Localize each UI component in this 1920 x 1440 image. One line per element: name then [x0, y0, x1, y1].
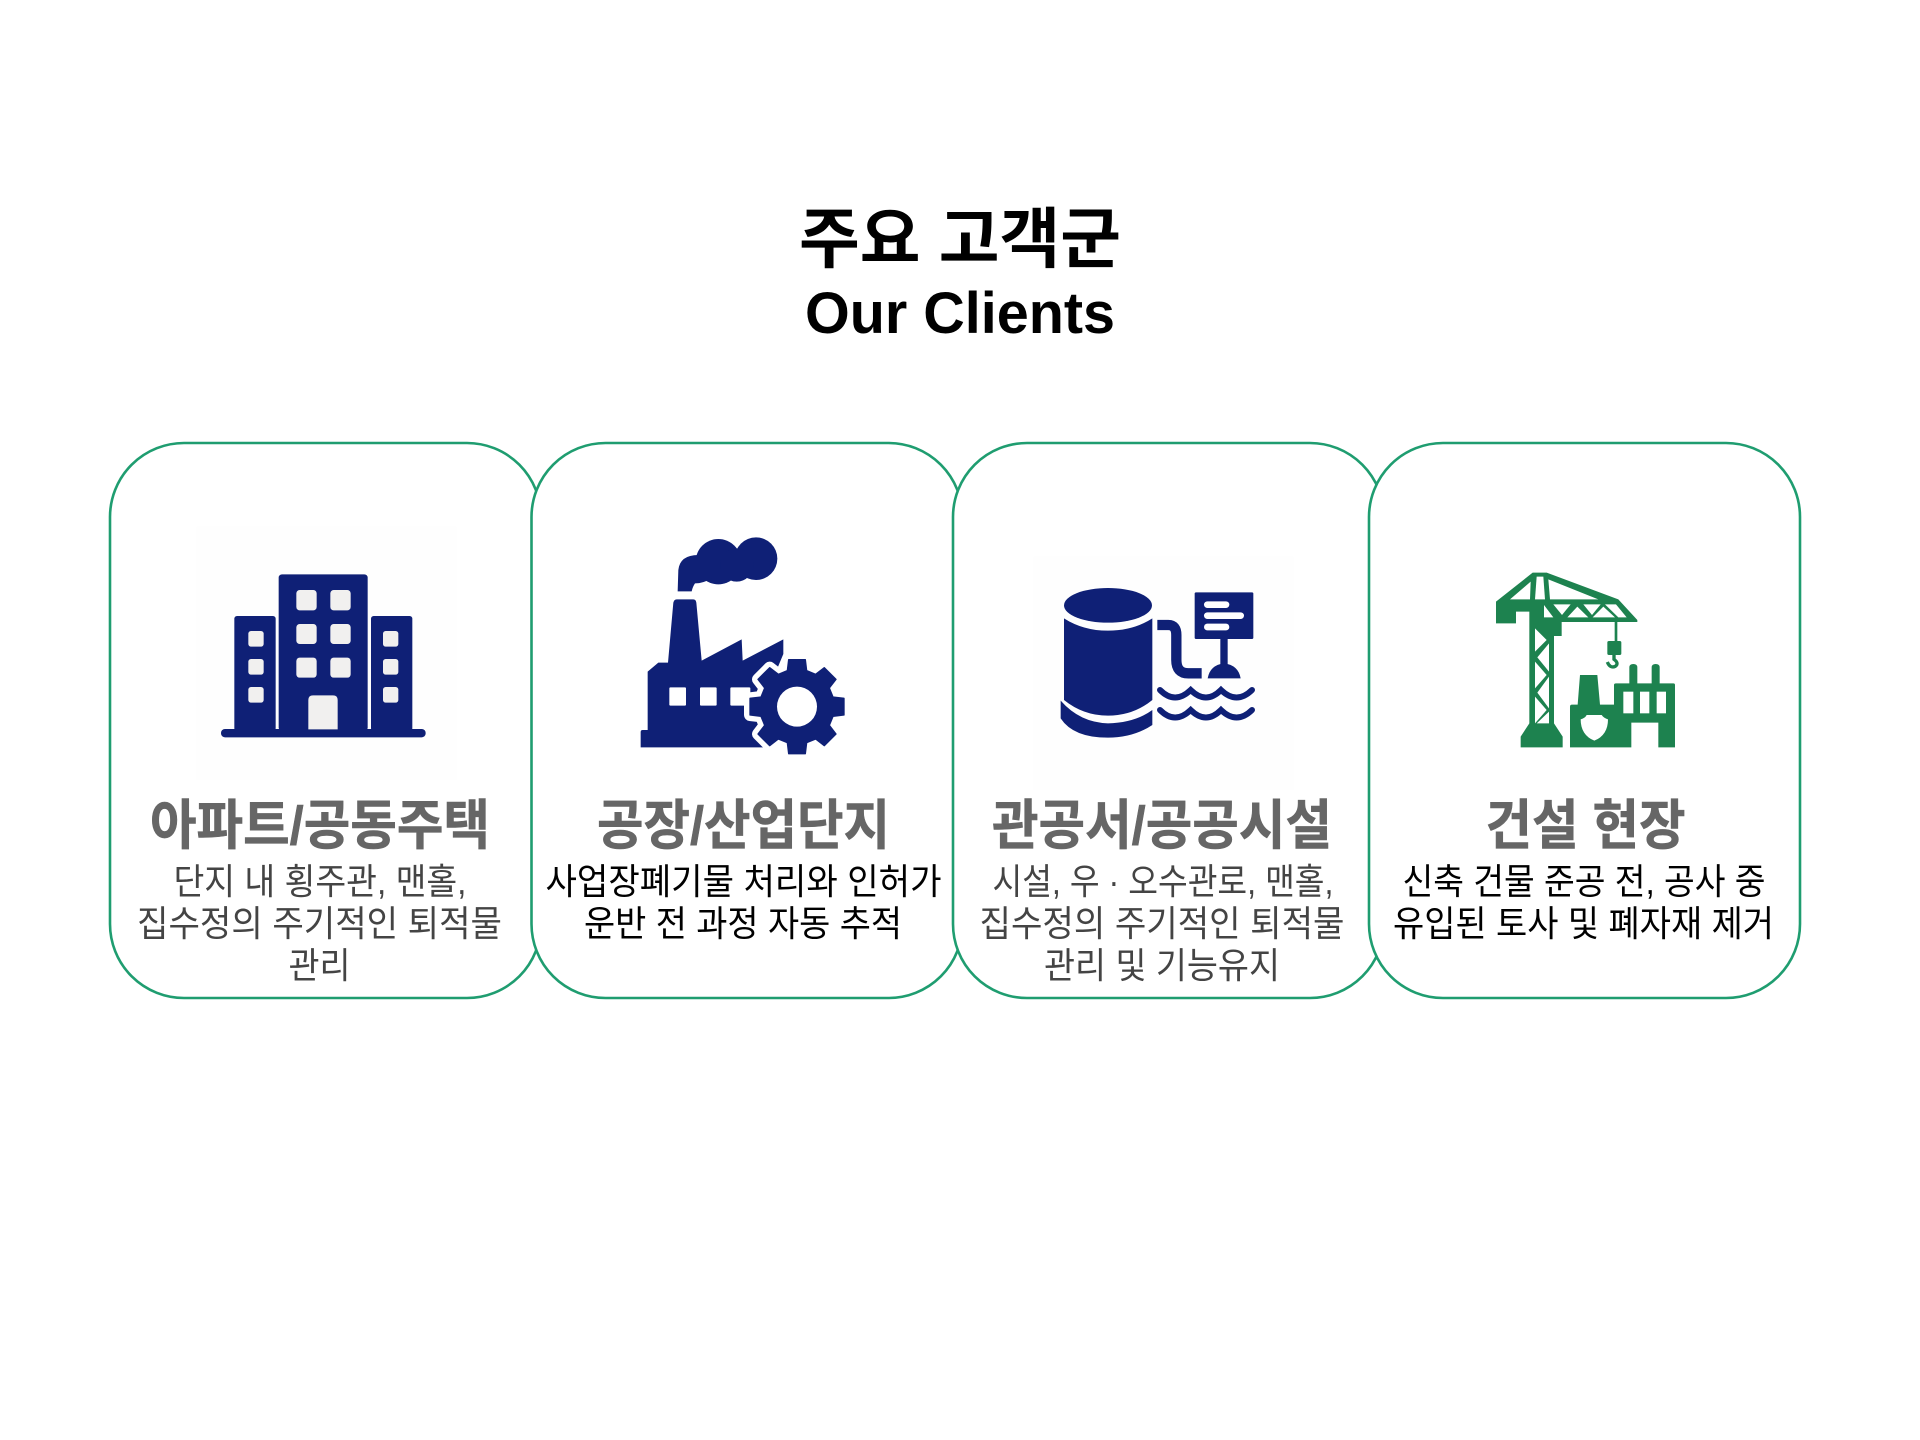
description: factories [546, 861, 942, 944]
panel: public facilities [953, 443, 1384, 998]
description: construction sites: 유입된 토사 및 폐자재 제거 [1393, 903, 1774, 944]
title [799, 202, 1121, 346]
heading: apartments: 아파트/공동주택 [150, 796, 490, 856]
icon: apartment buildings [197, 527, 457, 780]
title: English: Our Clients [805, 281, 1115, 346]
panel: factories [532, 443, 962, 998]
title: Korean: 주요 고객군 [799, 202, 1121, 276]
description: public facilities: 집수정의 주기적인 퇴적물 [980, 903, 1344, 944]
description: factories: 사업장폐기물 처리와 인허가 [546, 861, 942, 902]
heading: construction sites: 건설 현장 [1486, 796, 1686, 856]
description: construction sites [1393, 861, 1774, 944]
icon: factory with gear [641, 537, 844, 754]
panel: construction sites [1369, 443, 1800, 998]
heading: factories: 공장/산업단지 [597, 796, 890, 856]
icon: water tank and pipe [1033, 557, 1293, 790]
description: construction sites: 신축 건물 준공 전, 공사 중 [1402, 861, 1766, 902]
description: apartments: 집수정의 주기적인 퇴적물 [137, 903, 502, 944]
panel: apartments [110, 443, 541, 998]
icon: tower crane and building [1496, 573, 1675, 747]
description: apartments: 관리 [288, 945, 350, 986]
heading: public facilities: 관공서/공공시설 [992, 796, 1332, 856]
description: public facilities [980, 861, 1344, 986]
description: public facilities: 시설, 우 · 오수관로, 맨홀, [992, 861, 1334, 902]
description: apartments [137, 861, 502, 986]
description: apartments: 단지 내 횡주관, 맨홀, [174, 861, 466, 902]
description: factories: 운반 전 과정 자동 추적 [584, 903, 902, 944]
description: public facilities: 관리 및 기능유지 [1044, 945, 1280, 986]
